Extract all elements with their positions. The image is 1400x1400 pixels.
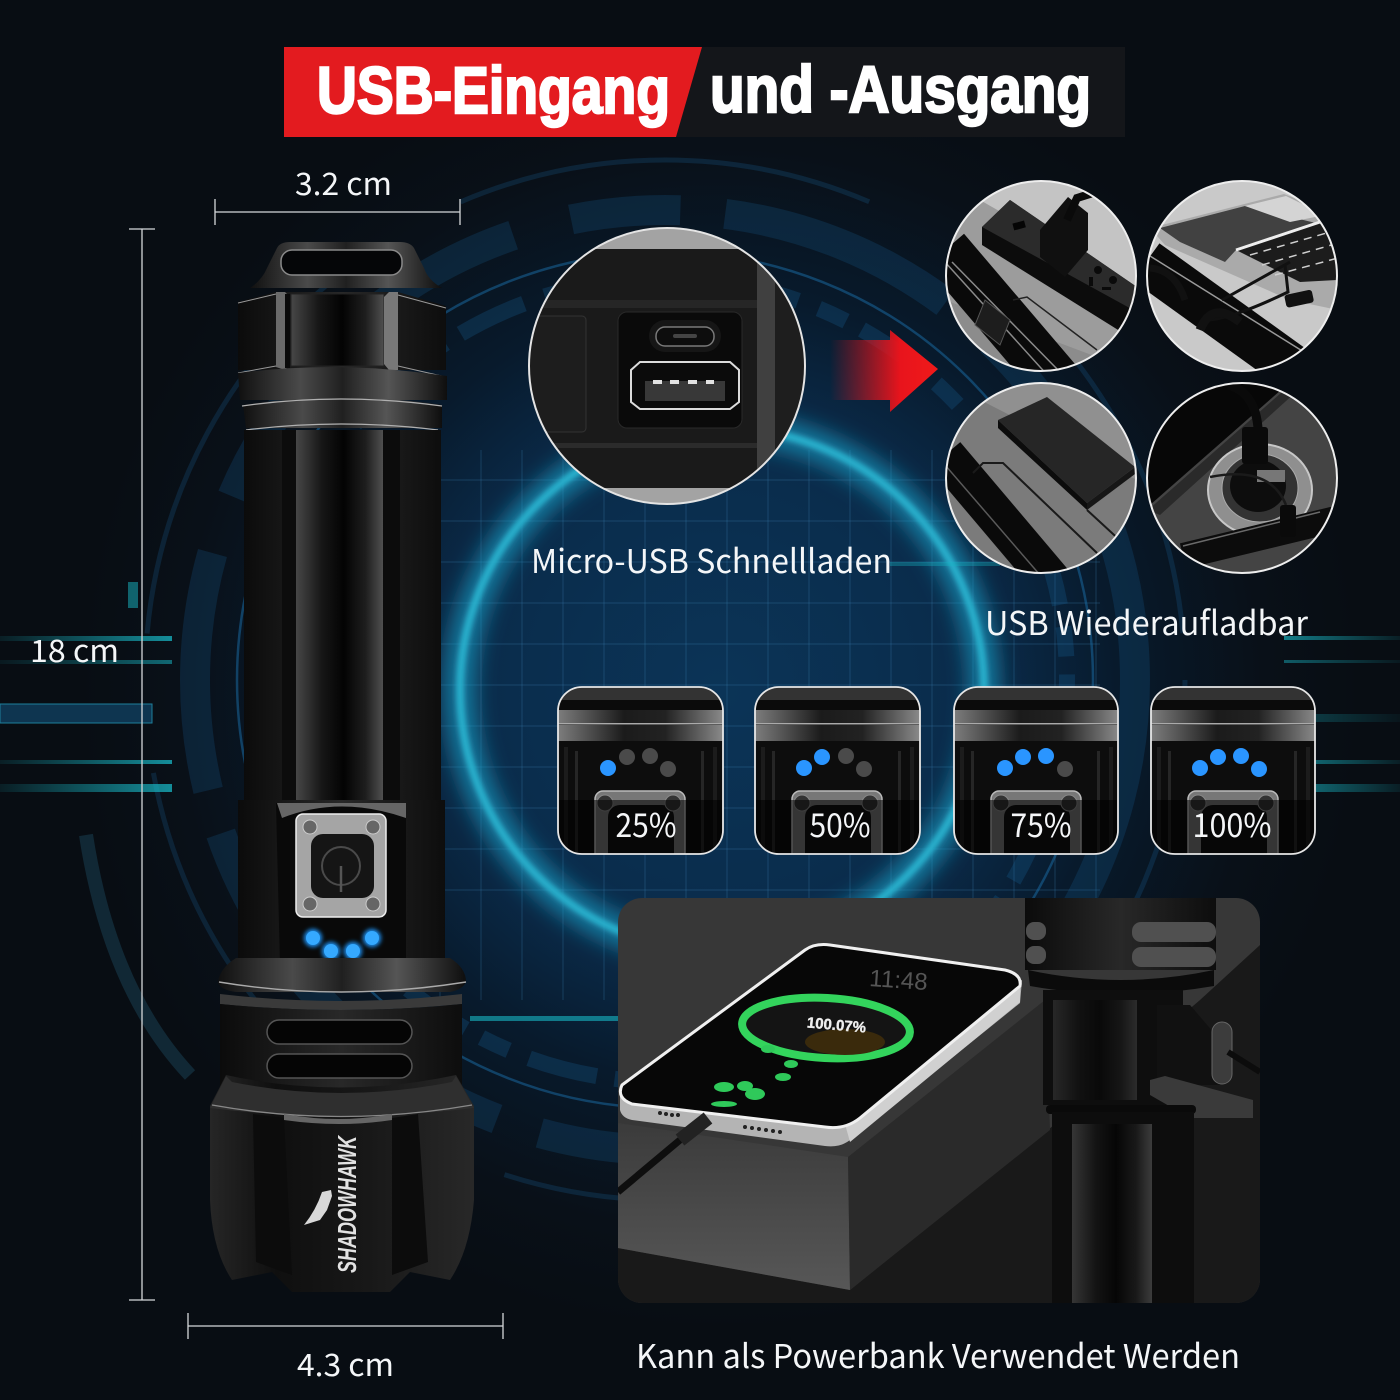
battery level: 100% [1151, 687, 1316, 865]
phone [620, 945, 1022, 1146]
caption: Kann als Powerbank Verwendet Werden: Kann als Powerbank Verwendet Werden [636, 1330, 1240, 1378]
tail loop [250, 242, 442, 288]
circle: charging from power bank [945, 382, 1137, 585]
battery level: 75% [954, 687, 1119, 865]
phone: 11:48 [869, 965, 929, 996]
battery level: 75%: 75% [1010, 799, 1072, 847]
block [618, 1000, 1050, 1290]
circle: charging from socket [945, 180, 1137, 385]
battery LEDs [304, 929, 381, 960]
circle: charging in car [1146, 382, 1340, 574]
battery level: 50%: 50% [810, 799, 870, 847]
caption: Micro-USB Schnellladen: Micro-USB Schnellladen [531, 535, 892, 583]
dimension: width 3.2 cm [215, 159, 460, 225]
charge ring [741, 994, 911, 1062]
battery level: 100%: 100% [1192, 799, 1272, 847]
phone: 100.07% [806, 1014, 867, 1037]
title text: USB-Eingang: USB-Eingang [317, 53, 670, 127]
bezel [210, 1075, 474, 1292]
dimension: height 18 cm [30, 229, 155, 1300]
head ribbed [220, 1004, 462, 1090]
logo [304, 1134, 362, 1273]
tail cap [238, 292, 446, 370]
switch section [238, 800, 445, 966]
title text: und -Ausgang: und -Ausgang [710, 52, 1091, 126]
cable [618, 1118, 708, 1192]
head collar [218, 958, 466, 992]
battery level: 25%: 25% [616, 799, 676, 847]
body tube [244, 430, 441, 802]
dimension: width 4.3 cm [188, 1313, 503, 1385]
logo: SHADOWHAWK [332, 1134, 362, 1273]
panel: powerbank charging a phone [618, 898, 1260, 1303]
battery level: 50% [755, 687, 920, 865]
dimension: width 3.2 cm: 3.2 cm [295, 159, 392, 204]
caption: USB Wiederaufladbar: USB Wiederaufladbar [985, 597, 1308, 645]
title banner [284, 47, 1125, 137]
USB A port [631, 362, 739, 409]
circle: charging from laptop [1146, 180, 1338, 380]
flashlight in panel [1025, 898, 1260, 1303]
flashlight [210, 242, 474, 1292]
battery level: 25% [558, 687, 723, 865]
power button [296, 814, 386, 917]
circle: USB ports close-up [528, 227, 806, 505]
dimension: width 4.3 cm: 4.3 cm [297, 1340, 394, 1385]
port recess [618, 312, 742, 428]
dimension: height 18 cm: 18 cm [30, 626, 119, 671]
micro USB port [649, 320, 721, 352]
arrow [830, 330, 938, 412]
